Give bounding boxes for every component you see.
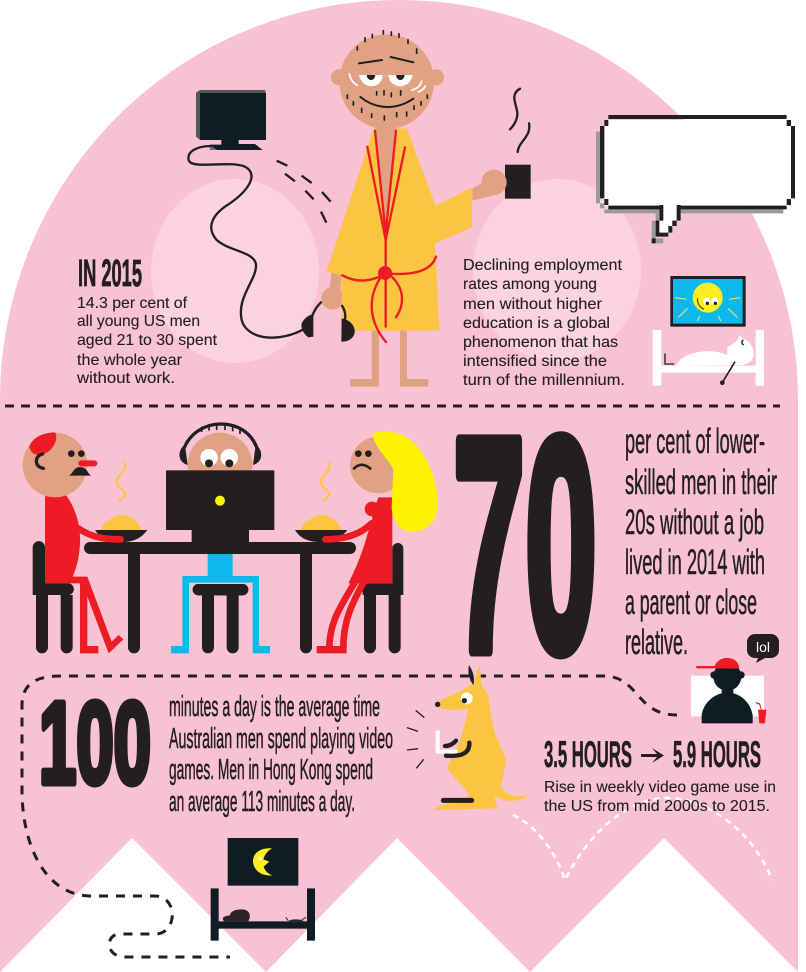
robe knot bbox=[378, 266, 392, 280]
text: 100 minutes: an average 113 minutes a day. bbox=[169, 786, 355, 818]
sleeper on shelf bbox=[223, 909, 304, 921]
drink bbox=[756, 702, 766, 723]
legs bbox=[350, 328, 428, 387]
left man bbox=[23, 432, 123, 653]
robe red trim bbox=[342, 131, 436, 342]
text: rise in weekly video game use: Rise in weekly video game use in bbox=[544, 779, 776, 796]
text: 70 per cent bbox=[625, 422, 777, 662]
headphones bbox=[301, 302, 355, 342]
silhouette bbox=[702, 687, 753, 723]
text: declining employment bbox=[463, 257, 625, 389]
woman bbox=[317, 432, 438, 653]
white dashed arcs bbox=[513, 798, 772, 880]
text: declining employment: phenomenon that has bbox=[463, 334, 618, 351]
illustration: man in bathrobe with monitor and coffee bbox=[188, 31, 531, 387]
center boy with laptop bbox=[166, 424, 274, 653]
left chair bbox=[33, 541, 74, 653]
text: in 2015: 14.3 per cent of bbox=[77, 295, 188, 312]
text: rise in weekly video game use bbox=[544, 779, 776, 815]
moon bbox=[253, 848, 272, 876]
head bbox=[331, 31, 444, 129]
right chair bbox=[363, 543, 403, 653]
pale circle left bbox=[151, 179, 319, 363]
dashed divider bbox=[5, 404, 780, 408]
neck bbox=[375, 127, 397, 240]
text: declining employment: men without higher bbox=[463, 296, 603, 313]
text: declining employment: rates among young bbox=[463, 276, 597, 293]
right arm, mug and hand bbox=[472, 165, 531, 201]
steam and bowls bbox=[95, 463, 347, 542]
text: 70 per cent: relative. bbox=[625, 623, 688, 662]
text: in 2015 bbox=[76, 253, 218, 387]
head bbox=[710, 663, 745, 691]
illustration: boy at computer with lol bubble bbox=[691, 658, 766, 723]
text: 100 minutes: games. Men in Hong Kong spend bbox=[169, 754, 373, 786]
bed and sleeper bbox=[653, 330, 764, 386]
table bbox=[84, 542, 356, 653]
arrow bbox=[641, 748, 664, 763]
icon: moon on TV with bed bbox=[211, 838, 315, 941]
text: declining employment: intensified since the bbox=[463, 353, 607, 370]
text: rise in weekly video game use: the US from mid 2000s to 2015. bbox=[544, 798, 770, 815]
steam bbox=[510, 89, 529, 152]
lol bubble: lol bbox=[756, 639, 770, 655]
pale circle right bbox=[473, 179, 641, 361]
big number 100: 100 bbox=[39, 678, 151, 808]
text: in 2015: all young US men bbox=[77, 313, 200, 330]
text: 70 bbox=[453, 376, 597, 715]
dashed path bbox=[22, 676, 677, 957]
dashed motion lines bbox=[277, 161, 331, 223]
cap bbox=[696, 658, 739, 669]
monitor bbox=[196, 90, 266, 150]
text: in 2015: aged 21 to 30 spent bbox=[77, 332, 218, 349]
icon: sun on TV and man in bed bbox=[653, 276, 764, 386]
illustration: kangaroo with game device bbox=[407, 663, 530, 810]
robe bbox=[327, 128, 472, 331]
lol bubble bbox=[747, 634, 779, 663]
text: 3.5 hours to 5.9 hours: 3.5 HOURS bbox=[544, 734, 632, 775]
left arm and hand bbox=[321, 270, 344, 310]
text: in 2015: IN 2015 bbox=[78, 253, 142, 295]
speech bubble bbox=[596, 115, 795, 243]
text: declining employment: Declining employment bbox=[463, 257, 623, 274]
text: in 2015: without work. bbox=[76, 370, 175, 387]
text: 100 minutes: minutes a day is the average time bbox=[169, 691, 380, 723]
illustration: family at the table bbox=[23, 424, 438, 653]
tv with sun bbox=[670, 276, 746, 327]
text: Australian men spend playing video bbox=[169, 723, 393, 755]
text: declining employment: turn of the millennium. bbox=[463, 372, 625, 389]
text: in 2015: the whole year bbox=[77, 352, 183, 369]
text: 100 minutes bbox=[169, 691, 393, 818]
cable bbox=[188, 146, 305, 338]
stool bbox=[193, 584, 248, 653]
text: declining employment: education is a global bbox=[463, 315, 610, 332]
